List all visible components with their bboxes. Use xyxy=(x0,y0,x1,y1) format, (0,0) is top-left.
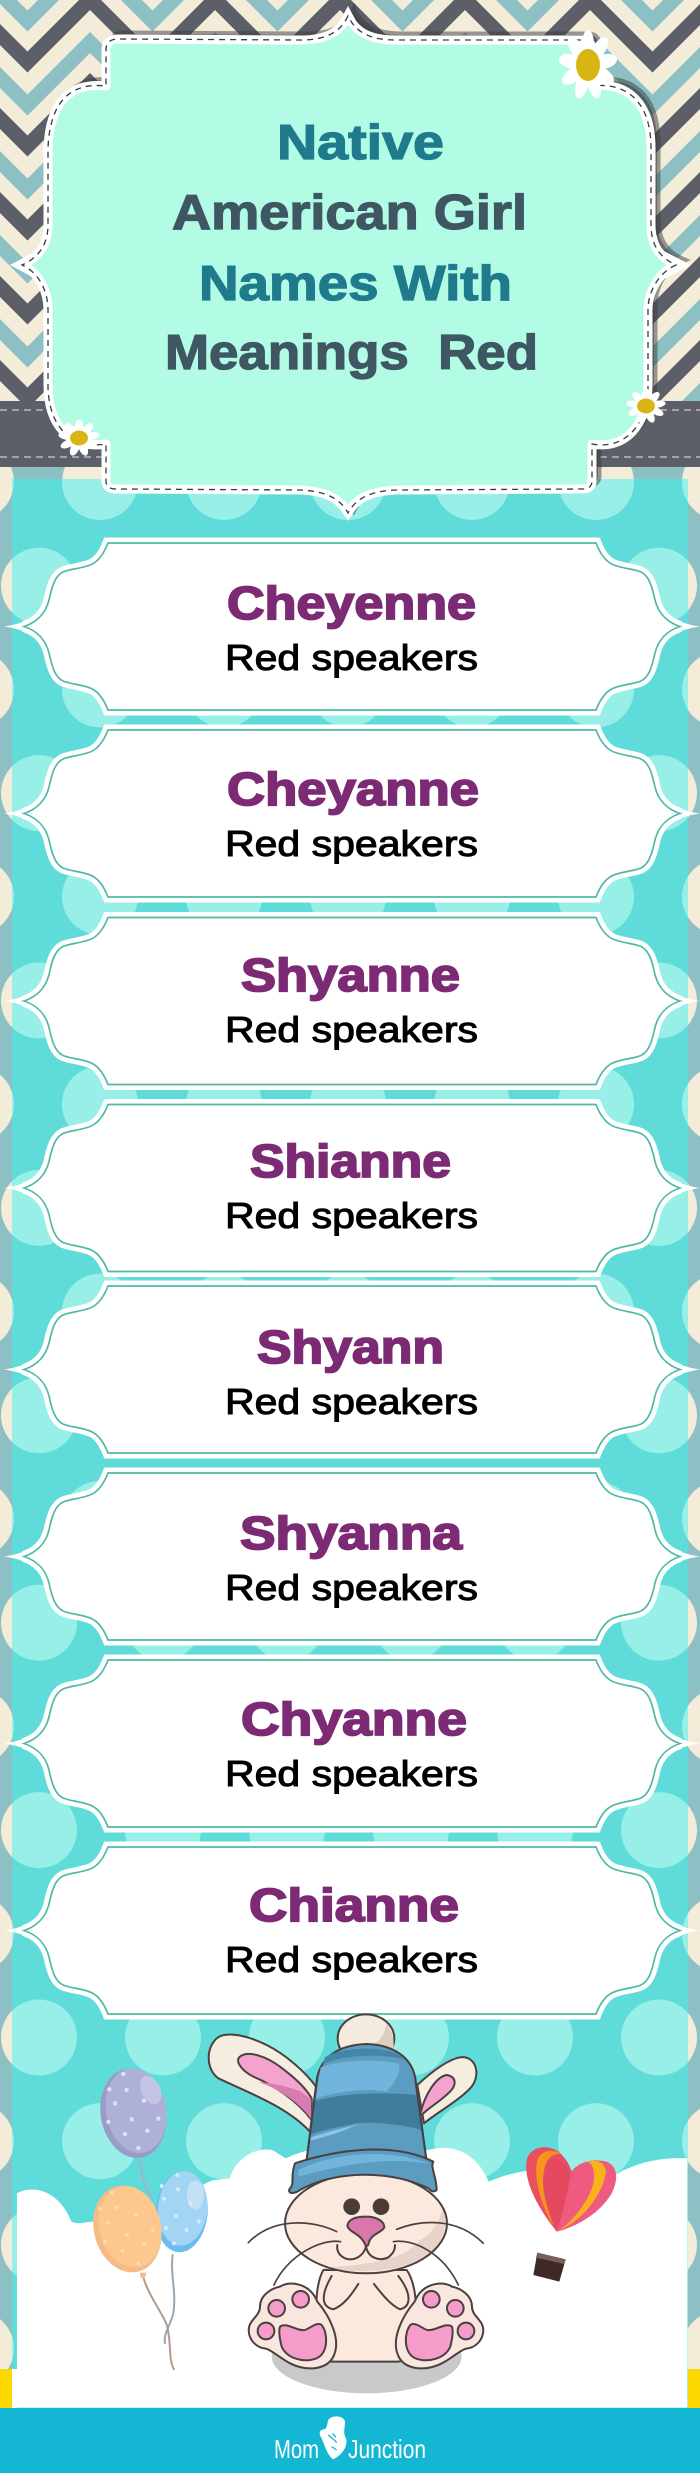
card: Chyanne xyxy=(4,1660,700,1827)
card: Cheyenne xyxy=(4,543,700,710)
bunny xyxy=(209,2014,483,2393)
dotted side strip background xyxy=(0,467,700,2419)
card: Cheyanne: Cheyanne xyxy=(227,763,479,815)
bunny right ear xyxy=(417,2057,476,2123)
card: Chianne: Red speakers xyxy=(225,1939,478,1980)
card: Shyanna: Red speakers xyxy=(225,1567,478,1608)
card: Chianne xyxy=(4,1847,700,2014)
card: Shyanna: Shyanna xyxy=(240,1507,462,1559)
header chevron background xyxy=(0,0,700,402)
logo wordmark xyxy=(274,2434,426,2464)
logo wordmark: Mom xyxy=(274,2434,319,2464)
bunny body xyxy=(316,2270,416,2362)
heart balloon xyxy=(526,2147,616,2232)
title text: Meanings Red xyxy=(165,326,538,380)
card: Shyanne: Red speakers xyxy=(225,1009,478,1050)
bunny hat pompom xyxy=(338,2014,394,2062)
icon: daisy top right xyxy=(558,30,618,101)
bunny head xyxy=(285,2173,447,2273)
bunny striped hat xyxy=(289,2044,437,2193)
title text: Names With xyxy=(199,257,512,311)
card: Shyanne: Shyanne xyxy=(241,949,460,1001)
card: Shyanne xyxy=(4,918,700,1084)
title text xyxy=(165,116,538,380)
card: Shyann: Shyann xyxy=(257,1321,444,1373)
dark stitched band xyxy=(0,401,700,467)
icon: daisy lower right xyxy=(626,388,666,424)
card: Shianne: Shianne xyxy=(250,1135,451,1187)
card: Shianne xyxy=(4,1104,700,1272)
card: Shianne: Red speakers xyxy=(225,1195,478,1236)
card: Chyanne: Chyanne xyxy=(241,1693,467,1745)
icon: daisy lower left xyxy=(58,419,100,457)
card: Shyanna xyxy=(4,1473,700,1640)
card: Cheyenne: Red speakers xyxy=(225,637,478,678)
yellow corner accents xyxy=(0,2369,700,2408)
bunny right foot xyxy=(396,2283,483,2368)
bunny left foot xyxy=(249,2283,336,2368)
bunny whiskers xyxy=(248,2223,483,2285)
bunny left ear xyxy=(209,2035,316,2132)
bottom illustration scene xyxy=(17,2014,687,2408)
logo wordmark: Junction xyxy=(348,2434,426,2464)
basket xyxy=(533,2253,566,2282)
title text: Native xyxy=(277,116,444,170)
MomJunction logo xyxy=(274,2416,426,2464)
card: Cheyenne: Cheyenne xyxy=(227,577,476,629)
title text: American Girl xyxy=(172,186,527,240)
title panel xyxy=(10,6,691,521)
card: Shyann xyxy=(4,1286,700,1453)
balloons xyxy=(84,2063,211,2369)
card: Cheyanne: Red speakers xyxy=(225,823,478,864)
footer bar xyxy=(0,2408,700,2473)
card: Shyann: Red speakers xyxy=(225,1381,478,1422)
card: Chianne: Chianne xyxy=(249,1879,459,1931)
icon: logo figure xyxy=(320,2416,346,2459)
card: Cheyanne xyxy=(4,730,700,897)
white clouds xyxy=(17,2147,687,2408)
card: Chyanne: Red speakers xyxy=(225,1753,478,1794)
